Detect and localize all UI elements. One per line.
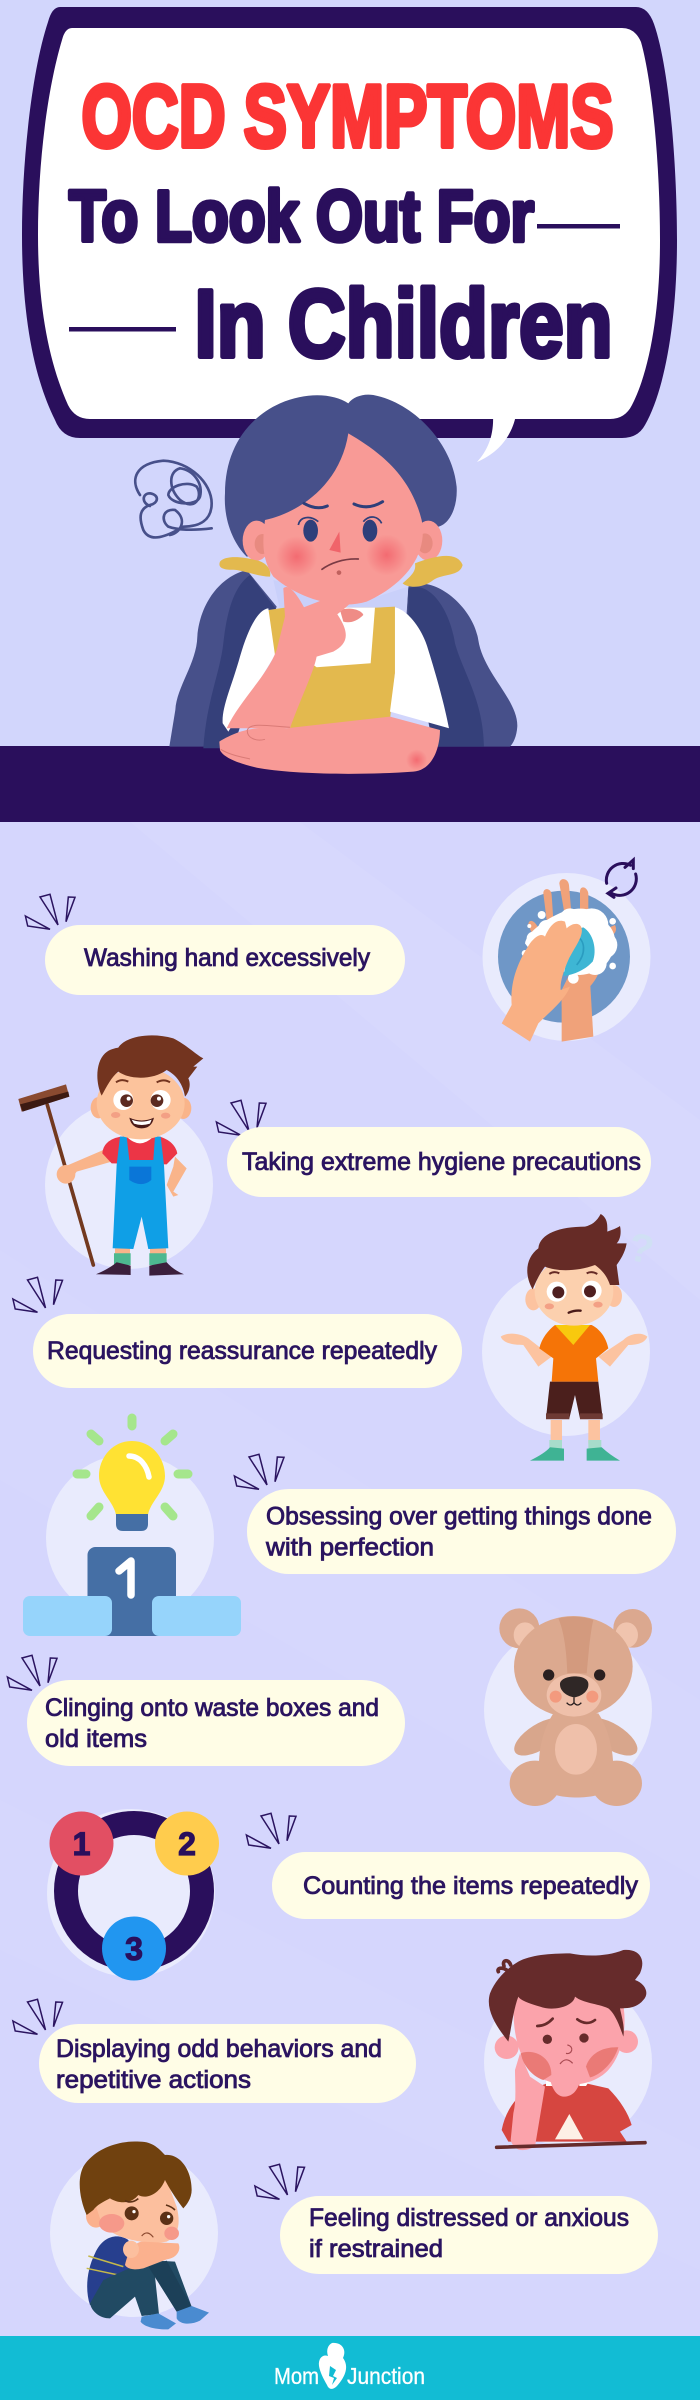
pigtails [169, 570, 277, 747]
pill 5 [27, 1680, 405, 1766]
chest [285, 608, 375, 667]
icon: number ring: 1 [73, 1826, 90, 1862]
sparks 1 [25, 894, 75, 929]
pill 6 [272, 1852, 650, 1919]
logo mark [319, 2343, 346, 2389]
front hand [502, 921, 582, 1042]
pill 3 [33, 1314, 462, 1388]
raised arm and hand [227, 587, 359, 728]
wordmark [274, 2363, 425, 2389]
icon: teddy bear [499, 1608, 652, 1806]
label 4 [265, 1502, 652, 1562]
sleeve left [223, 608, 275, 732]
hair [225, 395, 457, 557]
dress [268, 607, 395, 728]
speech bubble [22, 7, 677, 462]
soap [563, 927, 595, 976]
elbow blush [406, 749, 427, 771]
illustration: worried girl [135, 395, 517, 774]
face [263, 433, 423, 605]
label 7: repetitive actions [56, 2066, 251, 2094]
title rule left [69, 327, 176, 332]
soap foam [522, 908, 617, 984]
header background [0, 0, 700, 822]
ears [243, 521, 271, 561]
card 4: perfection [23, 1418, 676, 1636]
desk band [0, 746, 700, 822]
pill 4 [247, 1489, 676, 1574]
logo: MomJunction [274, 2343, 425, 2389]
label 4: with perfection [265, 1534, 434, 1562]
scribble [135, 461, 212, 537]
wordmark: Junction [347, 2363, 425, 2389]
cheeks [276, 536, 317, 577]
label 8: if restrained [309, 2235, 443, 2263]
icon: crouching boy [80, 2141, 209, 2329]
cards [7, 860, 676, 2329]
icon: bored boy [489, 1950, 646, 2150]
folded arm [219, 717, 440, 774]
wordmark: Mom [274, 2363, 319, 2389]
icon: lightbulb on podium [23, 1418, 241, 1636]
neck [340, 609, 363, 622]
icon: boy with broom [18, 1035, 203, 1276]
neck shadow [273, 580, 408, 610]
title line 2: To Look Out For [69, 177, 534, 257]
mouth [322, 559, 358, 569]
sleeve right [390, 607, 449, 728]
pill 7 [39, 2024, 416, 2103]
title [69, 66, 620, 378]
label 6: Counting the items repeatedly [303, 1872, 638, 1900]
label 5: Clinging onto waste boxes and [45, 1694, 379, 1722]
label 2: Taking extreme hygiene precautions [242, 1148, 641, 1176]
eyes and brows [303, 520, 318, 542]
scrunchies [219, 557, 270, 577]
title line 3: In Children [194, 270, 612, 378]
sparks 5 [7, 1655, 57, 1690]
sparks 7 [13, 1999, 62, 2034]
repeat arrows [606, 860, 636, 897]
backdrop circles [45, 873, 652, 2317]
label 5 [45, 1694, 379, 1753]
card 5: clinging [7, 1608, 652, 1806]
icon: number ring [50, 1812, 219, 1980]
icon: number ring: 2 [178, 1826, 196, 1862]
label 4: Obsessing over getting things done [266, 1502, 652, 1530]
label 7: Displaying odd behaviors and [56, 2035, 382, 2063]
sparks 2 [216, 1100, 266, 1135]
icon: washing hands [498, 860, 636, 1042]
nose [329, 532, 341, 553]
label 8: Feeling distressed or anxious [309, 2204, 629, 2232]
card 2: hygiene [18, 1035, 651, 1276]
label 3: Requesting reassurance repeatedly [47, 1337, 437, 1365]
card 6: counting [50, 1812, 650, 1980]
sparks 4 [234, 1454, 284, 1489]
card 8: anxious [80, 2141, 658, 2329]
card 1: washing hands [25, 860, 636, 1042]
label 8 [309, 2204, 629, 2263]
pill 2 [227, 1127, 651, 1197]
icon: shrugging boy [501, 1214, 658, 1461]
icon: shrugging boy: ? [625, 1225, 658, 1273]
pill 8 [280, 2196, 658, 2274]
sparks 6 [246, 1813, 296, 1848]
title rule right [537, 224, 620, 228]
card 3: reassurance [13, 1214, 658, 1461]
label 7 [56, 2035, 382, 2094]
sparks 8 [255, 2164, 304, 2199]
footer band [0, 2336, 700, 2400]
label 1: Washing hand excessively [84, 944, 370, 972]
body background [0, 822, 700, 2400]
card 7: odd behaviors [13, 1950, 646, 2150]
label 5: old items [45, 1725, 147, 1753]
pill 1 [45, 925, 405, 995]
sparks 3 [13, 1277, 62, 1312]
icon: number ring: 3 [125, 1931, 143, 1967]
